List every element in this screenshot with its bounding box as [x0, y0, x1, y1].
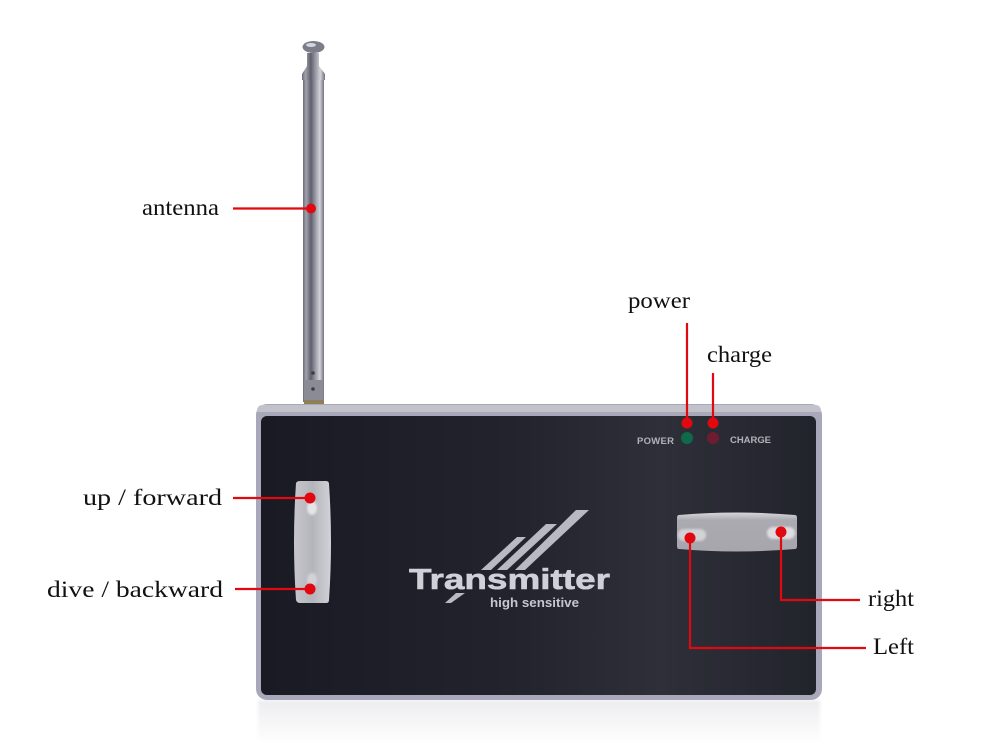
LED labels: CHARGE [730, 435, 771, 446]
callout labels: dive / backward [47, 577, 224, 602]
Transmitter logo: Transmitter [409, 564, 610, 596]
black front panel [261, 416, 816, 695]
reflection under device [258, 700, 820, 744]
callout labels: right [868, 586, 915, 611]
callout dots [304, 204, 786, 594]
LED indicators [681, 432, 719, 444]
left rocker button [294, 481, 331, 603]
callout labels: antenna [142, 195, 219, 220]
LED labels: POWER [637, 436, 674, 447]
Transmitter logo [409, 510, 610, 610]
antenna [302, 41, 325, 408]
LED labels [637, 435, 771, 447]
callout labels [47, 195, 915, 659]
callout labels: up / forward [83, 485, 223, 510]
Transmitter logo: high sensitive [490, 596, 579, 610]
callout labels: Left [873, 634, 915, 659]
callout labels: power [628, 288, 690, 313]
callout lines [233, 208, 866, 648]
right rocker button [677, 512, 797, 552]
transmitter body [256, 404, 822, 700]
callout labels: charge [707, 342, 772, 367]
